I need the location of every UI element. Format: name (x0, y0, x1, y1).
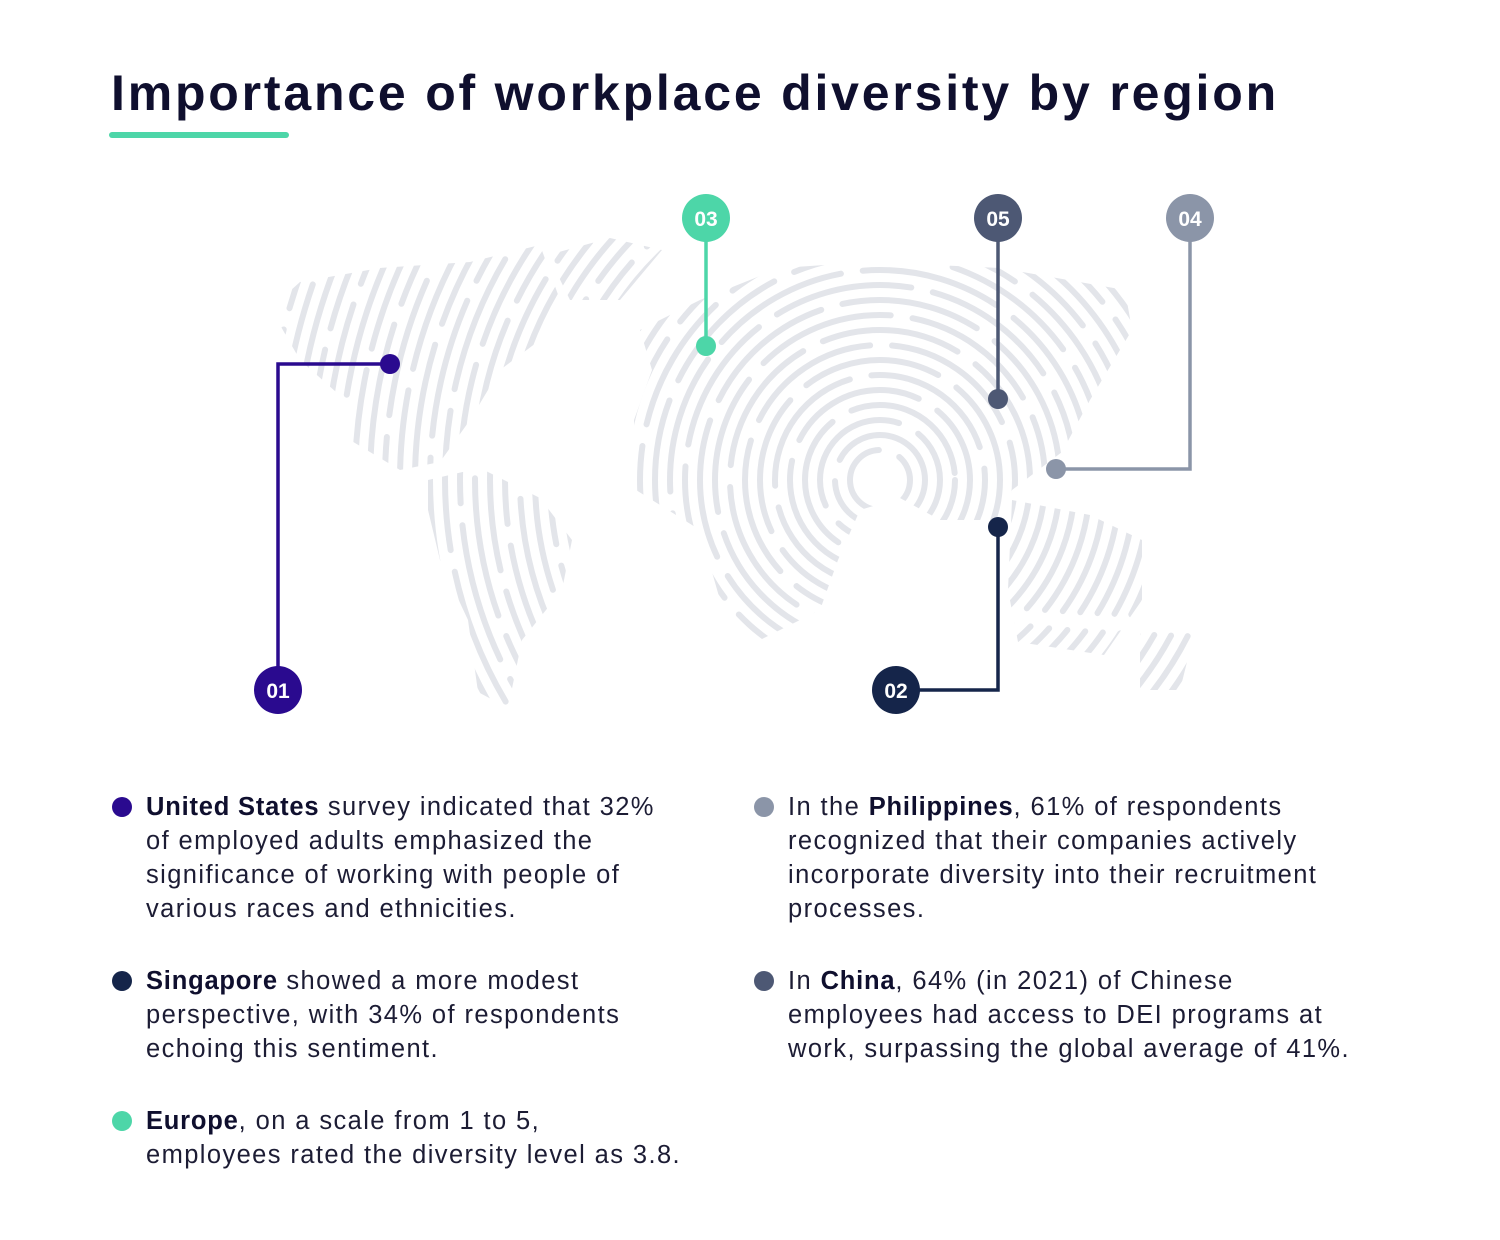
text: Philippines: recognized that their companies actively (788, 827, 1298, 855)
text: United States: of employed adults emphasized the (146, 827, 593, 855)
text: United States: various races and ethnicities. (146, 895, 517, 923)
text: Singapore: echoing this sentiment. (146, 1035, 439, 1063)
title underline (109, 132, 289, 138)
markers (254, 194, 1214, 714)
marker 03: 03 (694, 208, 718, 231)
marker 05: 05 (986, 208, 1010, 231)
marker 05 (974, 194, 1022, 409)
text: Singapore (112, 967, 620, 1063)
text: Europe: Europe, on a scale from 1 to 5, (146, 1107, 540, 1135)
text: United States: United States survey indicated that 32% (146, 793, 655, 821)
text: Philippines (754, 793, 1317, 923)
text: Singapore: perspective, with 34% of respondents (146, 1001, 620, 1029)
marker 04: 04 (1178, 208, 1202, 231)
text: China: work, surpassing the global average of 41%. (788, 1035, 1350, 1063)
text: Philippines: In the Philippines, 61% of respondents (788, 793, 1283, 821)
text: Singapore: Singapore showed a more modest (146, 967, 579, 995)
text: China (754, 967, 1350, 1063)
text: Europe (112, 1107, 681, 1169)
text: Europe: employees rated the diversity level as 3.8. (146, 1141, 681, 1169)
marker 02 (872, 517, 1008, 714)
marker 02: 02 (884, 680, 908, 703)
marker 01: 01 (266, 680, 290, 703)
text: China: In China, 64% (in 2021) of Chinese (788, 967, 1234, 995)
marker 01 (254, 354, 400, 714)
text: Philippines: incorporate diversity into their recruitment (788, 861, 1317, 889)
title: Importance of workplace diversity by region (111, 65, 1279, 121)
marker 03 (682, 194, 730, 356)
text: China: employees had access to DEI programs at (788, 1001, 1323, 1029)
marker 04 (1046, 194, 1214, 479)
text: United States (112, 793, 655, 923)
text: Philippines: processes. (788, 895, 925, 923)
text: United States: significance of working with people of (146, 861, 620, 889)
world map (282, 238, 1190, 704)
